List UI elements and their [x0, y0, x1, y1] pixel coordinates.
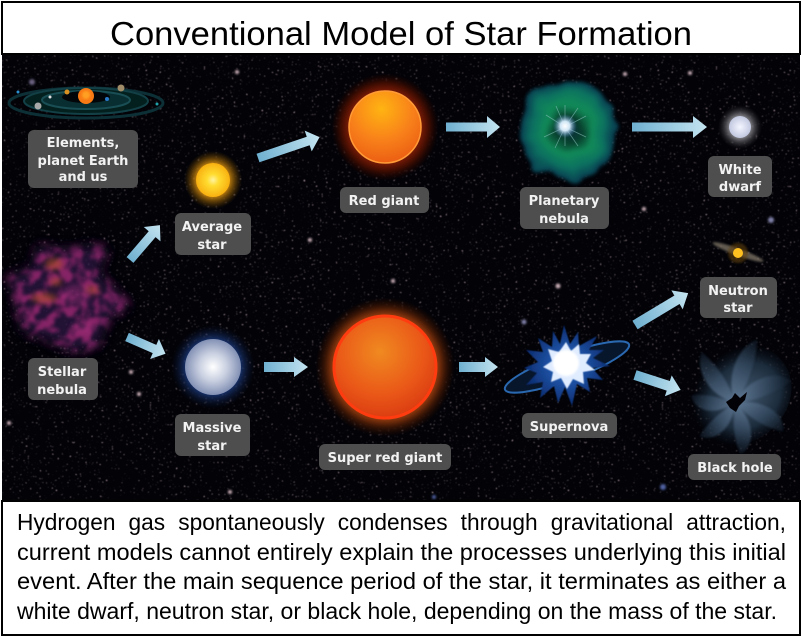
label: Elements, planet Earth and us: planet Earth [38, 154, 128, 169]
label: Supernova: Supernova [530, 420, 608, 435]
arrow: supernova to neutron star [629, 284, 694, 334]
label: Neutron star: Neutron [708, 284, 768, 299]
arrow: planetary nebula to white dwarf [632, 116, 707, 138]
label: Stellar nebula: nebula [37, 383, 87, 398]
icon: white dwarf [718, 105, 762, 149]
icon: supernova [501, 325, 633, 406]
arrow: nebula to massive star [123, 327, 170, 364]
arrow: massive star to super red giant [264, 357, 308, 377]
text block: description: event. After the main sequence period of the star, it terminates as either a [17, 568, 787, 594]
arrow: red giant to planetary nebula [446, 116, 500, 138]
arrow: nebula to average star [122, 218, 168, 267]
label: Red giant [340, 187, 429, 213]
panel: space background [2, 54, 800, 501]
text block: description [2, 501, 800, 635]
label: Neutron star [700, 277, 777, 318]
label: Red giant: Red giant [349, 194, 419, 209]
icon: planetary nebula [519, 80, 619, 180]
label: Elements, planet Earth and us: and us [59, 170, 108, 185]
label: Average star: Average [182, 220, 242, 235]
label: Elements, planet Earth and us: Elements, [47, 136, 119, 151]
label: Supernova [522, 413, 617, 438]
label: Planetary nebula [520, 187, 609, 229]
label: White dwarf: White [718, 163, 762, 178]
title [2, 2, 800, 54]
label: Massive star: star [197, 439, 227, 454]
arrow: super red giant to supernova [459, 357, 498, 377]
icon: neutron star [711, 239, 765, 265]
label: Stellar nebula [28, 358, 98, 400]
label: Massive star [175, 414, 250, 456]
label: Black hole: Black hole [697, 461, 773, 476]
text block: description: current models cannot entirely explain the processes underlying this initial [17, 539, 786, 565]
label: Super red giant [319, 444, 451, 470]
label: Planetary nebula: nebula [539, 212, 589, 227]
label: Elements, planet Earth and us [28, 130, 138, 188]
text block: description: white dwarf, neutron star, or black hole, depending on the mass of the star. [16, 598, 777, 624]
label: White dwarf [708, 156, 772, 197]
label: Stellar nebula: Stellar [38, 365, 87, 380]
label: Planetary nebula: Planetary [529, 194, 600, 209]
label: Black hole [688, 454, 781, 480]
label: Average star [175, 213, 251, 255]
icon: super red giant [315, 297, 455, 437]
icon: stellar nebula [8, 246, 130, 352]
arrow: supernova to black hole [632, 365, 684, 400]
icon: massive star [171, 325, 255, 409]
label: Super red giant: Super red giant [328, 451, 442, 466]
label: Neutron star: star [723, 301, 753, 316]
icon: red giant [331, 73, 439, 181]
icon: solar system [9, 84, 163, 118]
icon: average star [184, 151, 242, 209]
label: Average star: star [197, 238, 227, 253]
title: Conventional Model of Star Formation [110, 15, 692, 52]
label: White dwarf: dwarf [719, 180, 761, 195]
icon: black hole [665, 324, 802, 466]
text block: description: Hydrogen gas spontaneously condenses through gravitational attraction, [17, 509, 786, 535]
label: Massive star: Massive [183, 421, 242, 436]
arrow: average star to red giant [254, 127, 323, 168]
